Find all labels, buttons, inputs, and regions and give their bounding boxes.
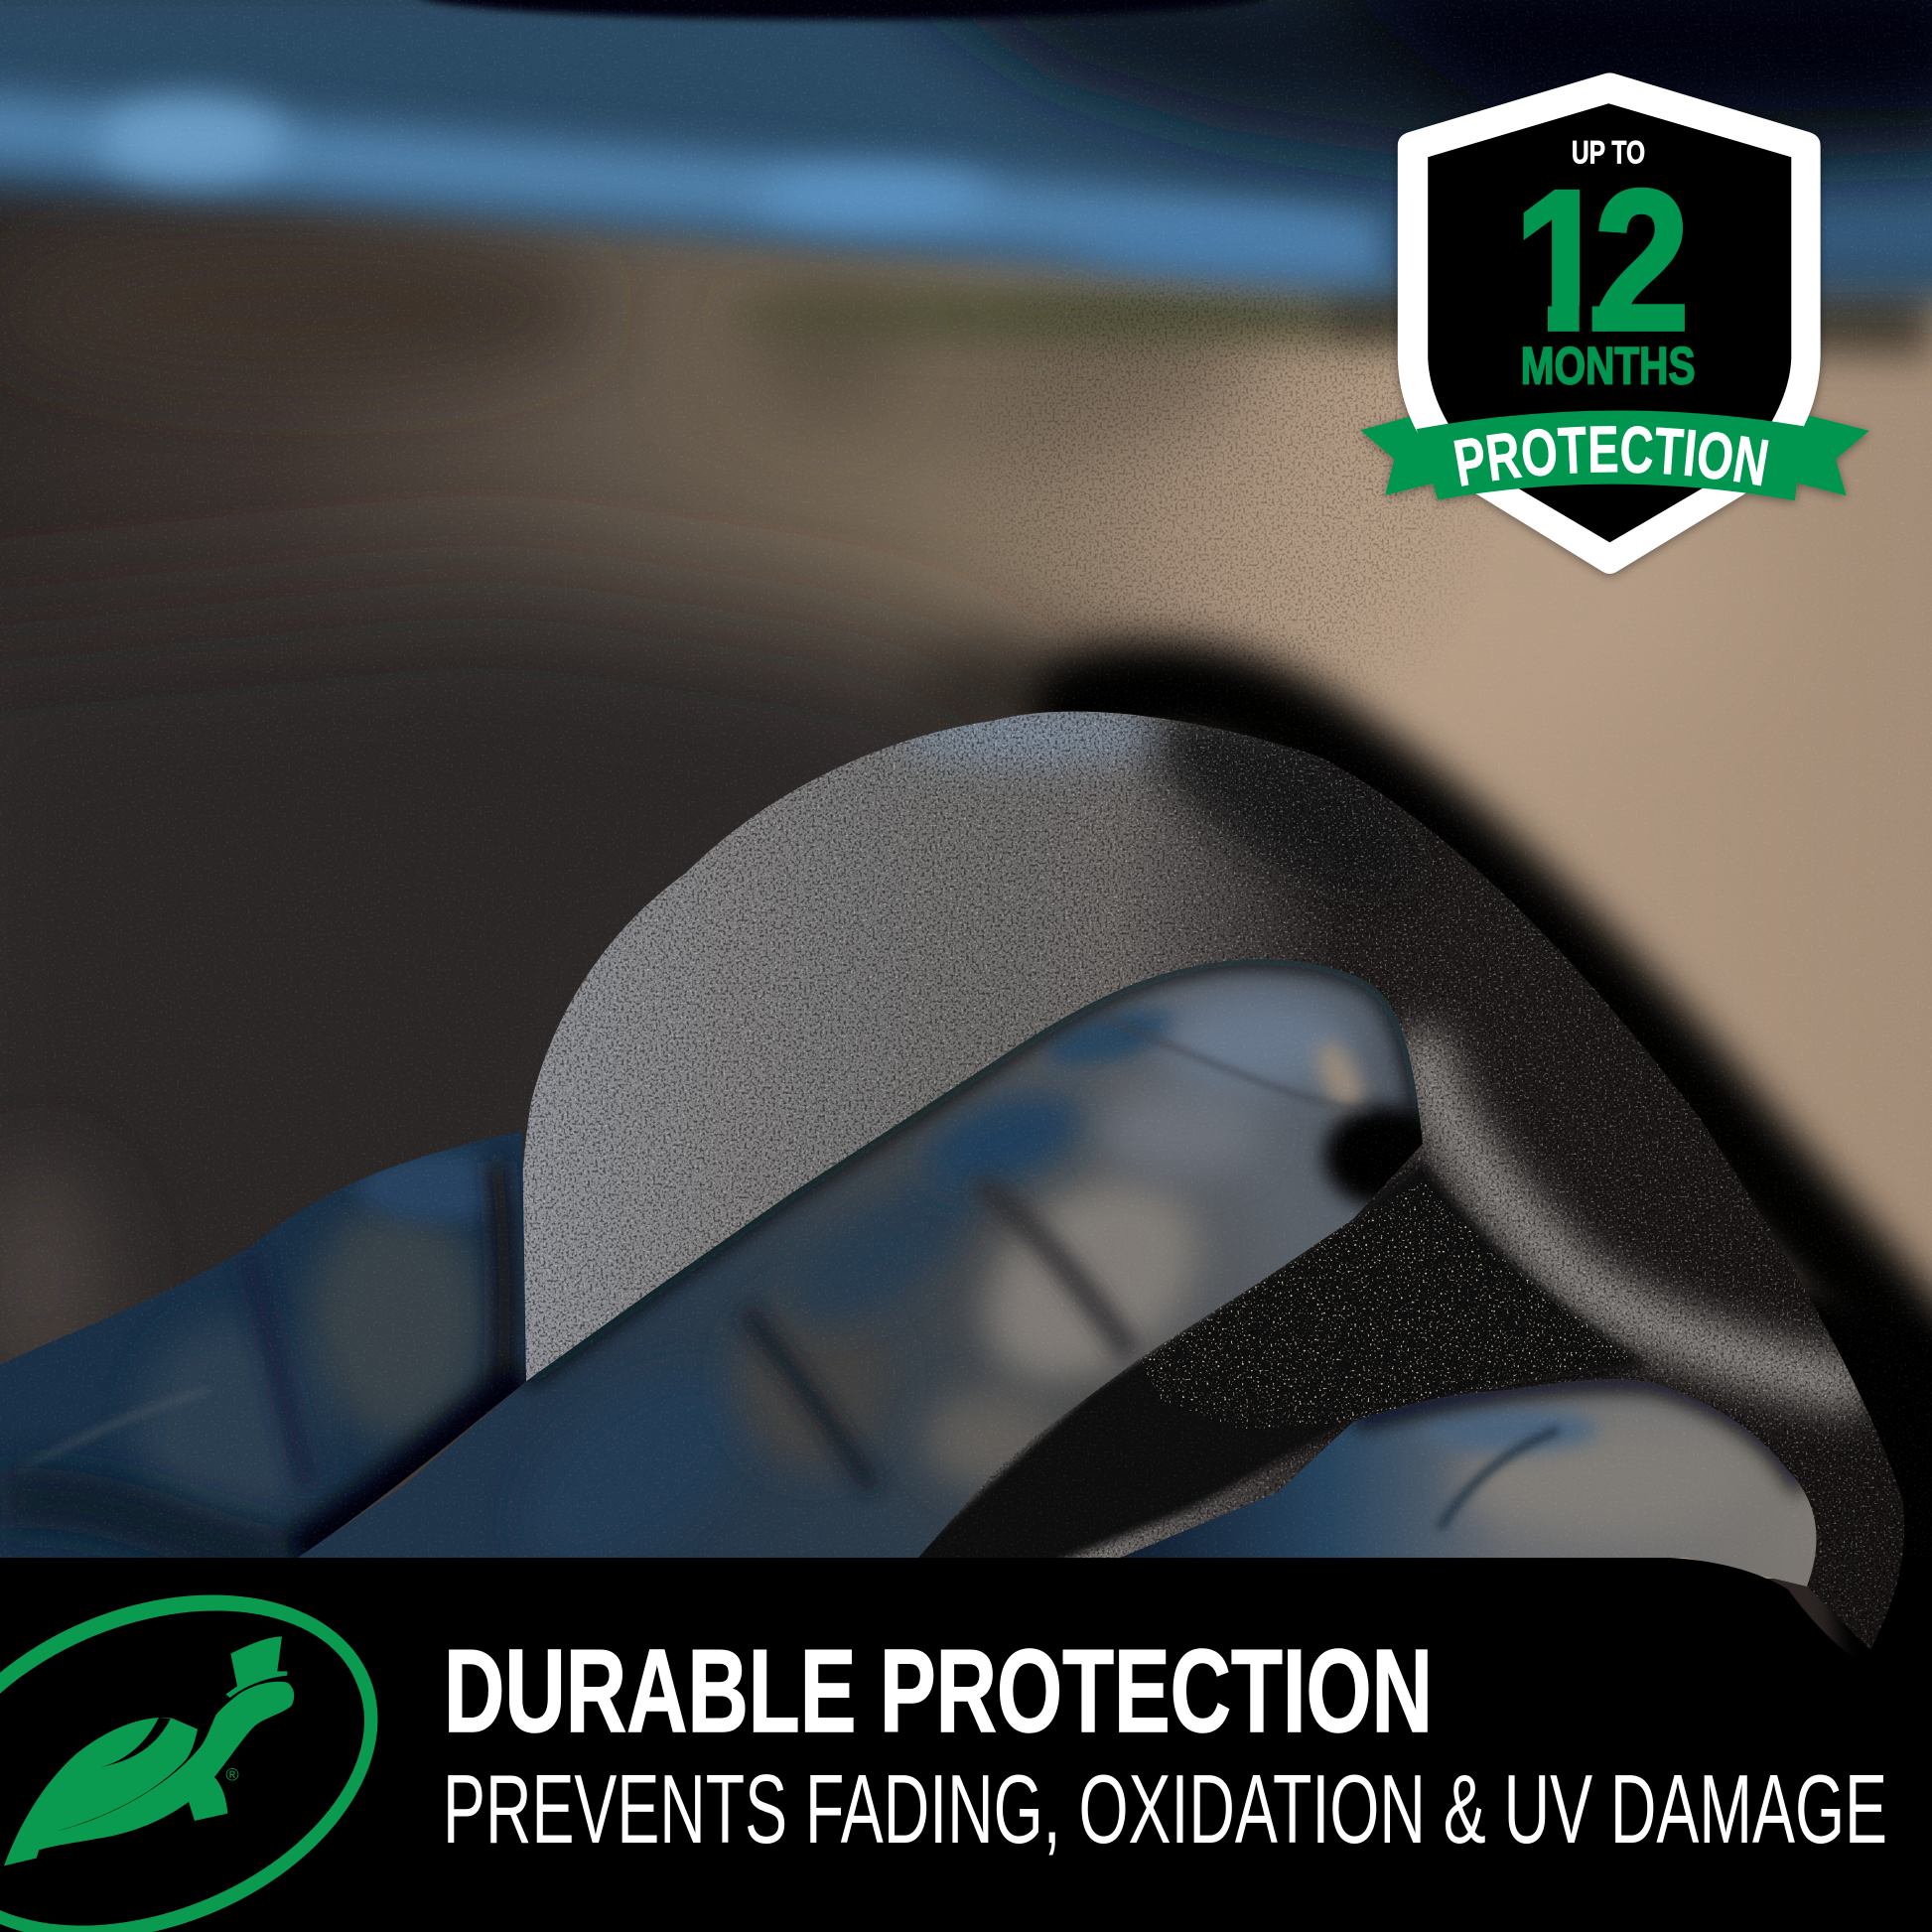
turtle shell highlight [101,1718,171,1767]
shield: black field [1428,103,1791,542]
heading: durable protection: DURABLE PROTECTION [444,1625,1433,1757]
text: up to: UP TO [1572,134,1645,170]
logo: turtle wearing top hat in green oval [0,1594,377,1932]
car trim surface: brown to tan [0,149,1932,1579]
ribbon tail: left [1360,414,1441,495]
logo: turtle [4,1636,294,1865]
text: protection on ribbon: PROTECTION [1453,426,1769,486]
glove: left finger [0,1122,536,1559]
glove: index finger [298,959,1423,1558]
logo: oval ring [0,1594,377,1932]
shadow under foam pad [953,685,1932,1708]
ribbon tail: right [1791,414,1869,495]
dark underside of foam pad [894,1162,1648,1569]
turtle shell slit [57,1716,215,1831]
ribbon: main band [1417,411,1804,500]
shield: white outline [1398,72,1821,574]
car trim surface: blue reflection band [0,0,1932,298]
turtle top hat [225,1636,287,1698]
badge: up to 12 months protection shield [1360,72,1870,581]
turtle body and neck [4,1682,294,1865]
bottom black banner [0,1558,1932,1932]
text: 12: 12 [1514,149,1690,371]
text: months: MONTHS [1521,337,1695,395]
glove: lower right finger [1120,1379,1817,1587]
registered mark: ® [225,1765,239,1785]
foam applicator pad [496,678,1932,1658]
